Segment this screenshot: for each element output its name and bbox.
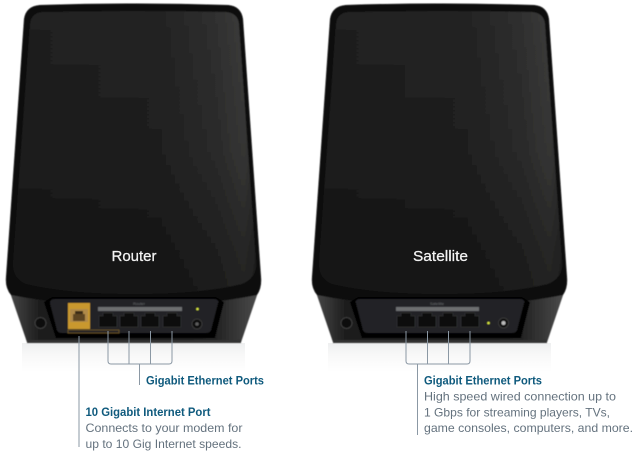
satellite gigabit callout: Gigabit Ethernet Ports	[424, 374, 542, 388]
satellite rear panel	[350, 297, 530, 338]
internet port callout: up to 10 Gig Internet speeds.	[86, 437, 242, 451]
satellite gigabit callout: High speed wired connection up to	[424, 390, 616, 404]
satellite gigabit callout: 1 Gbps for streaming players, TVs,	[424, 406, 610, 420]
satellite ethernet ports	[397, 313, 479, 327]
router front face	[13, 11, 256, 294]
internet port callout	[86, 405, 242, 451]
router device	[6, 4, 261, 372]
satellite name: Satellite	[413, 248, 468, 265]
satellite device	[312, 4, 567, 372]
router gigabit label: Gigabit Ethernet Ports	[146, 374, 264, 388]
satellite power button	[341, 318, 352, 328]
internet port leader line	[78, 336, 80, 447]
satellite label strip	[396, 307, 479, 311]
router ethernet bracket	[108, 331, 172, 385]
internet port callout: Connects to your modem for	[86, 421, 242, 435]
router power button	[35, 318, 46, 328]
satellite body: Satellite	[430, 301, 445, 306]
satellite gigabit callout: game consoles, computers, and more.	[424, 421, 633, 435]
router label strip	[98, 307, 182, 311]
satellite gigabit callout	[424, 374, 633, 435]
satellite status LED	[487, 322, 490, 324]
router floor reflection	[22, 343, 245, 372]
internet port callout: 10 Gigabit Internet Port	[86, 405, 211, 419]
router rear panel	[44, 297, 224, 338]
router ethernet ports	[99, 313, 181, 327]
router body: Router	[133, 301, 146, 306]
satellite front face	[319, 11, 562, 294]
router body	[6, 4, 261, 343]
satellite floor reflection	[328, 343, 551, 372]
satellite power jack	[498, 318, 508, 328]
router status LED	[196, 308, 199, 310]
satellite ethernet bracket	[406, 331, 470, 435]
router power jack	[192, 319, 202, 329]
router 10G port	[68, 303, 119, 333]
satellite body	[312, 4, 567, 343]
router name: Router	[112, 248, 156, 265]
